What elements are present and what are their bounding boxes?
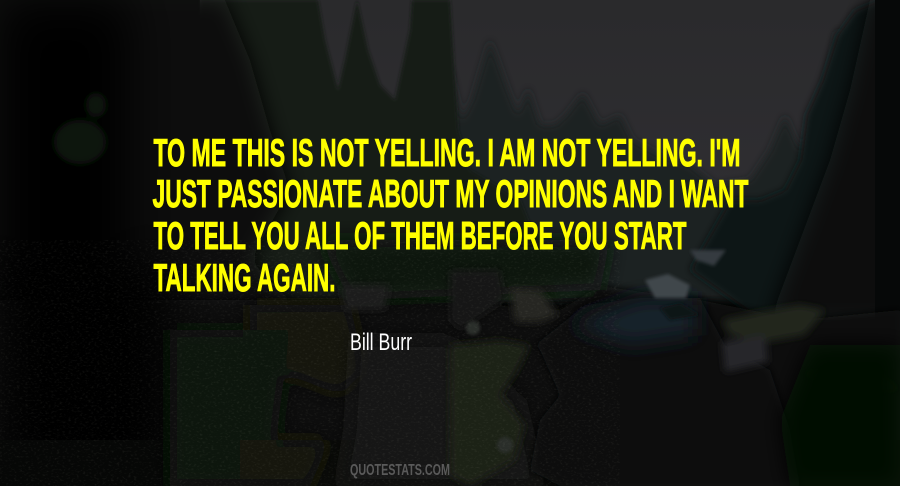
- pine glint on the left: [54, 93, 106, 164]
- grain texture: [0, 240, 620, 486]
- fog at river bend: [645, 274, 690, 298]
- quote text: [152, 132, 749, 300]
- sky: [200, 0, 900, 260]
- right trees: [690, 0, 900, 320]
- river: [530, 298, 800, 486]
- distant tree line: [430, 30, 870, 300]
- author name: Bill Burr: [350, 329, 412, 356]
- dark rocks at bend: [660, 303, 700, 320]
- watermark: QUOTESTATS.COM: [350, 462, 450, 479]
- left bank grass: [170, 305, 365, 486]
- dark conifer mass left: [0, 0, 290, 486]
- path in foreground: [340, 340, 540, 486]
- ground base: [0, 286, 900, 486]
- shadow behind text centre: [320, 240, 610, 300]
- pale light rock patch: [340, 285, 390, 310]
- right bank: [722, 305, 900, 390]
- teal water highlight: [570, 298, 695, 345]
- shore stones: [466, 321, 513, 453]
- near trees upper centre: [200, 0, 560, 300]
- near rocks left shore: [450, 270, 558, 486]
- dark far-right foreground: [780, 345, 900, 486]
- line 4: TALKING AGAIN.: [154, 257, 336, 300]
